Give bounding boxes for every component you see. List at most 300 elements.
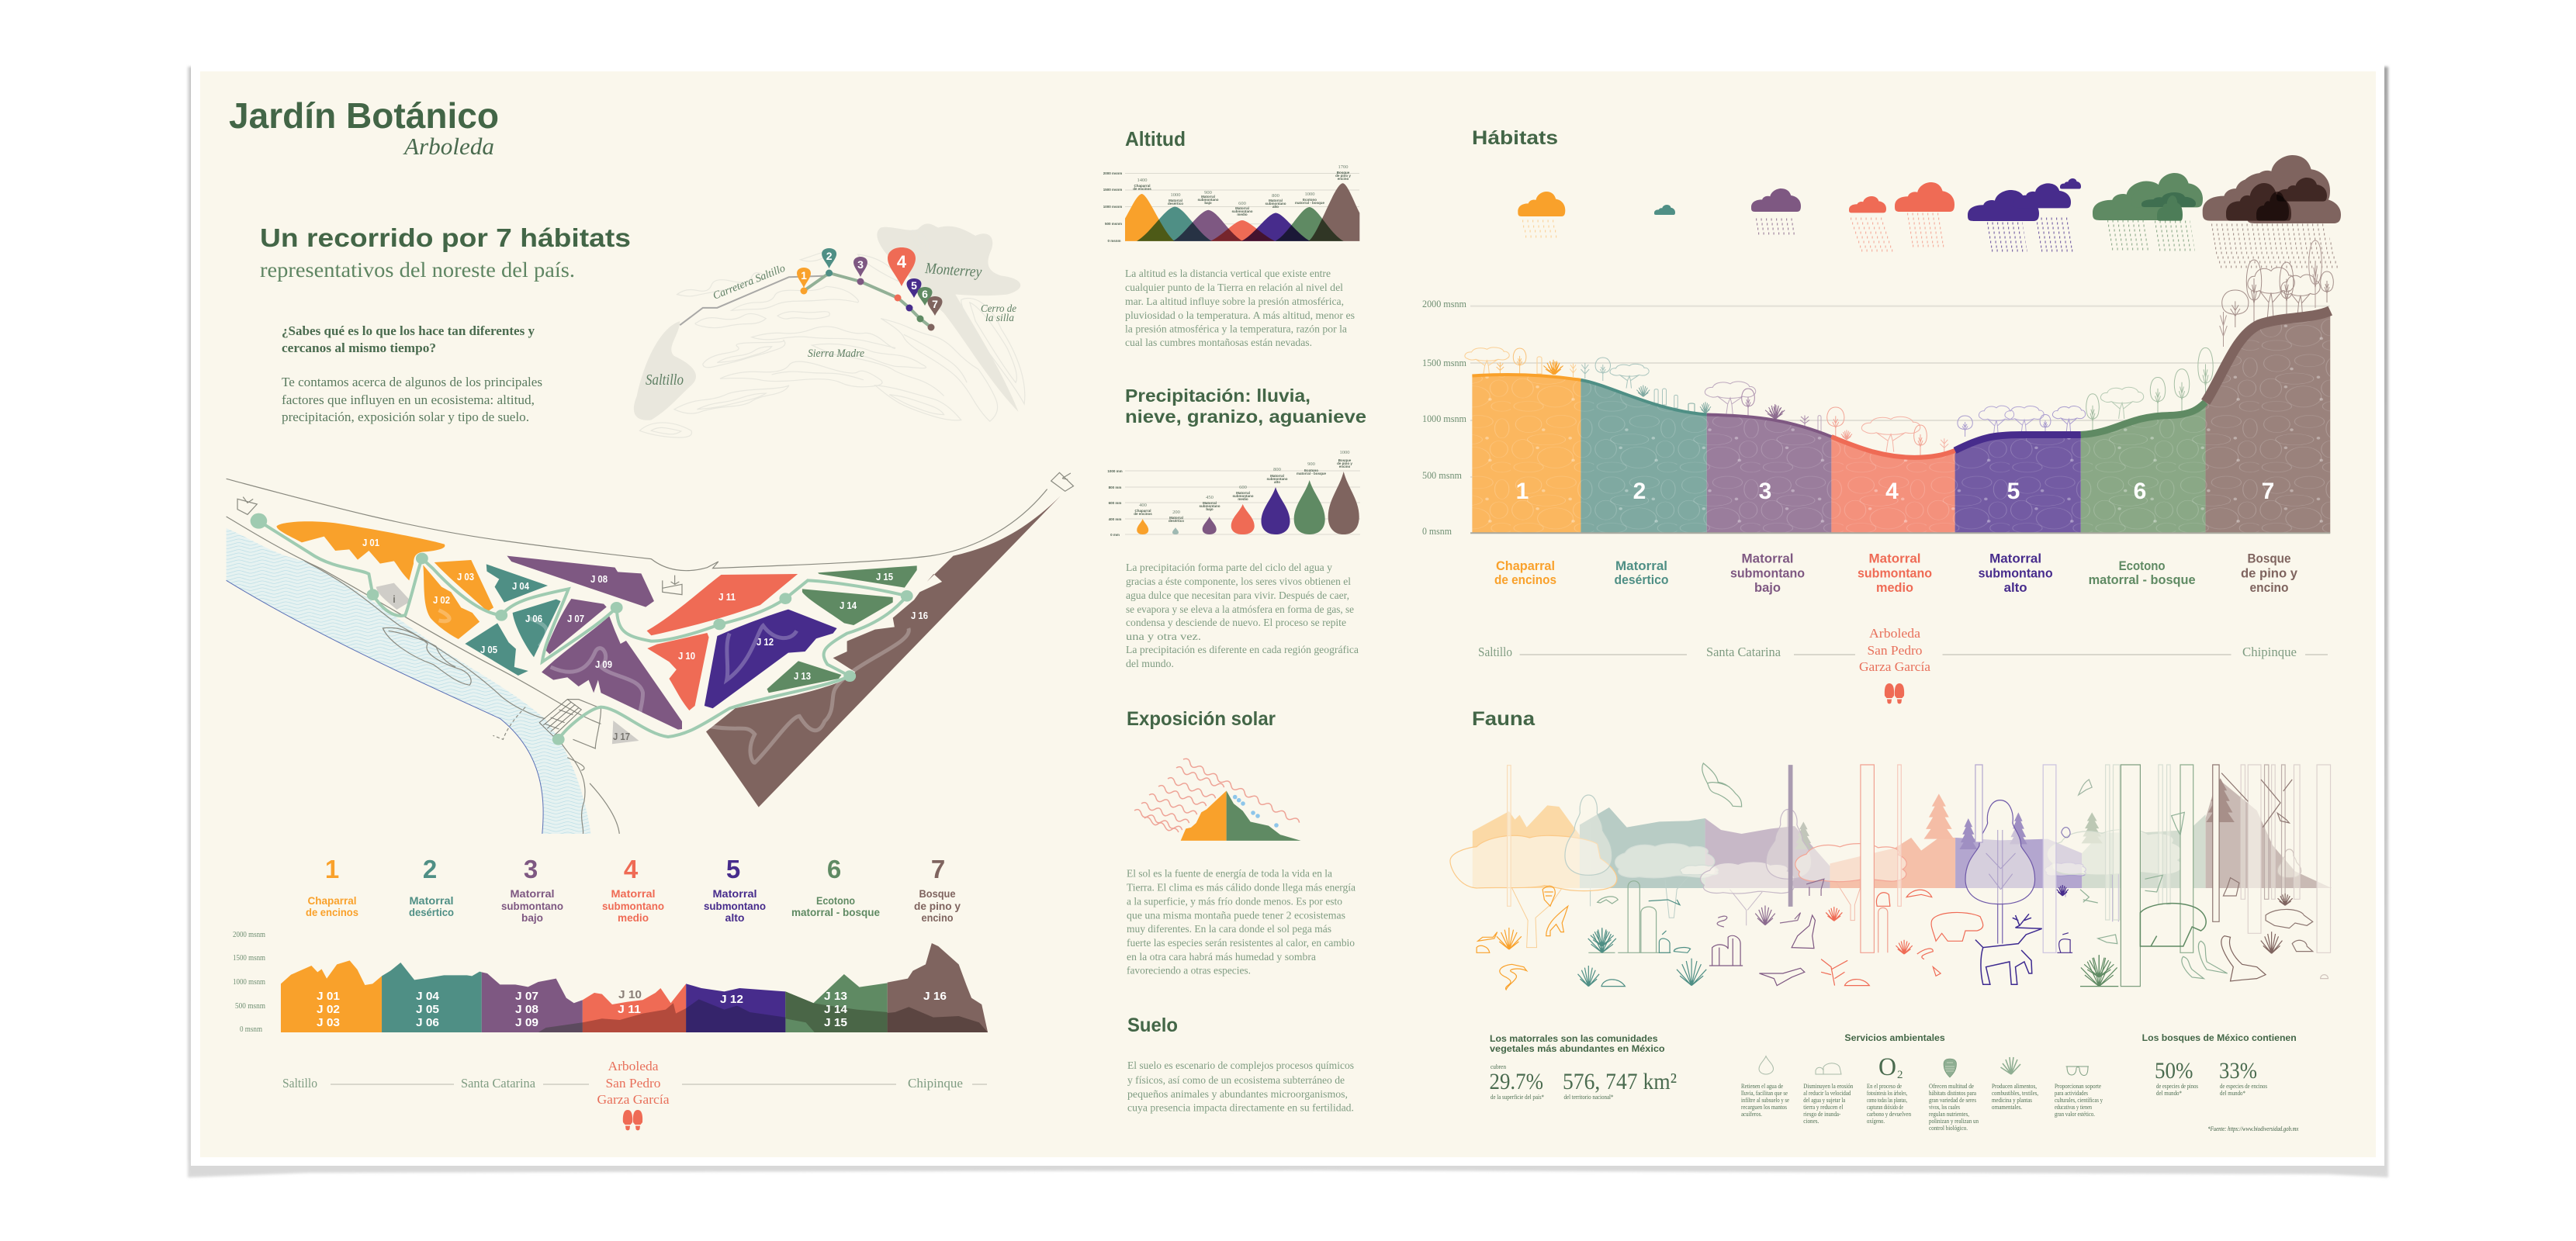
precipitacion text: La precipitación es diferente en cada región geográfica bbox=[1126, 644, 1359, 655]
intro text: cercanos al mismo tiempo? bbox=[282, 340, 436, 355]
tree crowns bbox=[1450, 795, 2301, 904]
service text columns: como todas las plantas, bbox=[1867, 1097, 1907, 1104]
route location line, right: San Pedro bbox=[1867, 643, 1923, 658]
altitud chart: 500 msnm bbox=[1105, 222, 1122, 226]
background mountains bbox=[1473, 778, 2332, 888]
stats: servicios ambientales bbox=[1741, 1034, 2103, 1132]
map labels: Cerro de bbox=[981, 303, 1016, 315]
service text columns: polinizan y realizan un bbox=[1929, 1118, 1979, 1125]
regional locator map bbox=[634, 223, 1025, 437]
altitud chart: encino bbox=[1338, 177, 1349, 181]
icon: footprints, left bbox=[623, 1110, 642, 1130]
altitud text: pluviosidad o la temperatura. A más altitud, menor es bbox=[1125, 309, 1355, 321]
altitud chart: 1000 msnm bbox=[1103, 205, 1122, 209]
precipitacion heading bbox=[1125, 385, 1366, 427]
altitud heading: Altitud bbox=[1125, 127, 1186, 150]
location pins: 2 bbox=[826, 250, 833, 262]
block labels: J 14 bbox=[840, 600, 857, 611]
precipitacion text: gracias a éste componente, los seres vivos obtienen el bbox=[1126, 576, 1351, 587]
profile labels: J 03 bbox=[317, 1016, 340, 1029]
walking path bbox=[258, 521, 907, 739]
map base shapes and contours bbox=[634, 223, 1025, 437]
exposicion text: favoreciendo a otras especies. bbox=[1127, 965, 1251, 977]
grid lines and axis: 0 msnm bbox=[1422, 525, 1452, 537]
altitud chart: 1400 bbox=[1137, 178, 1147, 183]
habitat names row: submontano bbox=[501, 900, 563, 912]
service text columns: al reducir la velocidad bbox=[1803, 1090, 1851, 1097]
precipitacion chart: 450 bbox=[1206, 495, 1214, 500]
altitud chart: 800 bbox=[1272, 193, 1279, 199]
habitat names: Chaparral bbox=[1496, 559, 1555, 573]
garden map shapes bbox=[227, 472, 1073, 834]
subtitle: un recorrido: representativos del noreste del país. bbox=[260, 258, 575, 282]
stats: bosques: del mundo* bbox=[2156, 1090, 2182, 1097]
habitat names: Ecotono bbox=[2119, 559, 2166, 573]
precipitacion heading: nieve, granizo, aguanieve bbox=[1125, 406, 1366, 427]
altitud text: la presión atmosférica y la temperatura, razón por la bbox=[1125, 323, 1347, 335]
altitud chart: 1000 bbox=[1305, 192, 1314, 197]
block J 11 bbox=[647, 574, 798, 635]
servicios heading: Servicios ambientales bbox=[1844, 1034, 1945, 1043]
block J 01 bbox=[276, 521, 445, 580]
profile labels: J 02 bbox=[317, 1003, 340, 1016]
habitats heading: Hábitats bbox=[1472, 127, 1558, 149]
stats: matorrales: del territorio nacional* bbox=[1564, 1094, 1614, 1101]
source note: *Fuente: https://www.biodiversidad.gob.mx bbox=[2207, 1125, 2299, 1132]
precipitacion chart: Bosque bbox=[1338, 458, 1352, 462]
habitat names: de encinos bbox=[1494, 573, 1556, 587]
intro text bbox=[282, 323, 542, 424]
route location line, right bbox=[1478, 626, 2328, 674]
block J 17 bbox=[612, 721, 639, 744]
roads bbox=[227, 479, 1047, 834]
strata numbers bbox=[1516, 479, 2274, 504]
location pins bbox=[797, 247, 942, 316]
precipitacion chart: submontano bbox=[1266, 477, 1288, 481]
exposicion text: en la otra cara habrá más humedad y sombra bbox=[1127, 951, 1316, 963]
block J 09 bbox=[542, 616, 682, 730]
altitud chart: desértico bbox=[1168, 202, 1183, 206]
route location line, left bbox=[282, 1059, 987, 1107]
precipitacion chart: Matorral bbox=[1270, 474, 1284, 478]
service text columns: Disminuyen la erosión bbox=[1803, 1083, 1853, 1090]
habitat numbers row: 7 bbox=[931, 855, 945, 883]
suelo text bbox=[1127, 1060, 1354, 1114]
block J 12 bbox=[705, 610, 837, 708]
service text columns: En el proceso de bbox=[1867, 1083, 1902, 1090]
profile labels: J 13 bbox=[824, 990, 847, 1003]
habitat names row: de encinos bbox=[306, 906, 358, 918]
path nodes bbox=[251, 513, 913, 745]
altitud chart: 2000 msnm bbox=[1103, 171, 1122, 175]
info block bbox=[376, 583, 410, 610]
axis labels: 1000 msnm bbox=[233, 978, 265, 987]
habitat names: alto bbox=[2004, 581, 2027, 595]
axis labels: 2000 msnm bbox=[233, 931, 265, 939]
panel: fauna bbox=[1450, 708, 2332, 990]
service text columns: regulan nutrientes, bbox=[1929, 1111, 1969, 1118]
stats: matorrales: cubren bbox=[1491, 1063, 1506, 1070]
precipitacion chart: Matorral bbox=[1203, 501, 1217, 505]
vegetation line art bbox=[1465, 240, 2333, 456]
precipitacion chart: de pino y bbox=[1337, 461, 1352, 465]
axis labels: 0 msnm bbox=[240, 1025, 262, 1034]
panel: precipitacion bbox=[1107, 385, 1366, 669]
altitud text: cualquier punto de la Tierra en relación al nivel del bbox=[1125, 282, 1343, 293]
altitud chart: alto bbox=[1272, 205, 1279, 209]
map labels: Monterrey bbox=[924, 260, 982, 281]
altitud chart: Ecotono bbox=[1303, 198, 1317, 202]
grid lines and axis: 2000 msnm bbox=[1422, 298, 1466, 309]
altitud chart: submontano bbox=[1232, 209, 1253, 213]
intro text: ¿Sabes qué es lo que los hace tan diferentes y bbox=[282, 323, 535, 338]
clouds bbox=[1518, 155, 2341, 223]
pines bbox=[1795, 778, 2235, 849]
stats: bosques: del mundo* bbox=[2220, 1090, 2245, 1097]
exposicion heading: Exposición solar bbox=[1127, 708, 1276, 730]
precipitacion heading: Precipitación: lluvia, bbox=[1125, 385, 1311, 406]
service text columns: lluvia, facilitan que se bbox=[1741, 1090, 1788, 1097]
poster cream panel bbox=[200, 71, 2376, 1157]
icon: agave bbox=[2000, 1057, 2020, 1074]
profile labels: J 01 bbox=[317, 990, 340, 1003]
habitat numbers row: 5 bbox=[726, 855, 740, 883]
habitat names row: Matorral bbox=[511, 887, 554, 900]
route location line, right: Chipinque bbox=[2242, 645, 2297, 659]
precipitacion text: una y otra vez. bbox=[1126, 631, 1201, 642]
precipitacion text: agua dulce que necesitan para vivir. Después de caer, bbox=[1126, 589, 1349, 601]
habitat names: Bosque bbox=[2247, 552, 2290, 566]
precipitacion text bbox=[1126, 562, 1359, 669]
precipitacion chart: submontano bbox=[1200, 504, 1220, 508]
altitud chart: 900 bbox=[1204, 190, 1212, 195]
precipitacion chart: bajo bbox=[1206, 507, 1214, 511]
precipitacion chart: 900 bbox=[1307, 461, 1315, 467]
habitat names row: Matorral bbox=[410, 894, 453, 907]
habitat names row: Matorral bbox=[712, 887, 757, 900]
precipitacion chart: 800 bbox=[1273, 467, 1281, 472]
stats: matorrales: de la superficie del país* bbox=[1491, 1094, 1544, 1101]
block J 05 bbox=[465, 623, 528, 676]
block labels: J 04 bbox=[512, 581, 529, 592]
block labels: J 13 bbox=[794, 671, 811, 682]
habitat names row bbox=[306, 887, 961, 924]
route location line, right: Santa Catarina bbox=[1706, 645, 1781, 659]
route bbox=[804, 273, 931, 327]
precipitacion chart: 200 bbox=[1172, 510, 1180, 515]
profile labels bbox=[317, 988, 947, 1029]
habitat names row: matorral - bosque bbox=[791, 906, 880, 918]
habitat names row: submontano bbox=[602, 900, 664, 912]
precipitacion chart: alto bbox=[1274, 480, 1280, 484]
altitud chart: 1700 bbox=[1338, 164, 1349, 170]
subtitle: un recorrido: Un recorrido por 7 hábitats bbox=[260, 223, 631, 252]
habitat numbers row: 2 bbox=[423, 855, 437, 883]
service text columns: riesgo de inunda- bbox=[1803, 1111, 1841, 1118]
stats: matorrales: 29.7% bbox=[1490, 1069, 1543, 1094]
precipitacion chart: de encinos bbox=[1134, 512, 1152, 516]
habitat names row: de pino y bbox=[914, 900, 961, 912]
intro text: Te contamos acerca de algunos de los principales bbox=[282, 375, 542, 389]
exposicion text: fuerte las especies serán resistentes al calor, en cambio bbox=[1127, 937, 1355, 949]
building bbox=[539, 700, 581, 736]
axis labels: 500 msnm bbox=[235, 1002, 265, 1011]
intro text: precipitación, exposición solar y tipo de suelo. bbox=[282, 410, 529, 424]
map labels: Sierra Madre bbox=[808, 347, 864, 360]
soil strata chart bbox=[1470, 311, 2330, 533]
title bbox=[229, 95, 499, 160]
block J 07 bbox=[545, 599, 607, 654]
service text columns: medicina y plantas bbox=[1992, 1097, 2032, 1104]
altitud text: mar. La altitud influye sobre la presión atmosférica, bbox=[1125, 296, 1344, 307]
route location line, left: Garza García bbox=[597, 1092, 670, 1107]
grid lines and axis: 1500 msnm bbox=[1422, 357, 1466, 368]
habitat names row: Matorral bbox=[611, 887, 655, 900]
precipitacion text: del mundo. bbox=[1126, 658, 1174, 669]
habitat numbers row: 1 bbox=[325, 855, 339, 883]
service text columns: Ofrecen multitud de bbox=[1929, 1083, 1974, 1090]
habitat names row: Chaparral bbox=[307, 894, 357, 907]
habitat names row: desértico bbox=[409, 906, 454, 918]
vertical trunks bars bbox=[1508, 765, 2331, 987]
route stops bbox=[801, 270, 934, 330]
service text columns: ornamentales. bbox=[1992, 1104, 2022, 1111]
precipitacion chart: 600 bbox=[1239, 485, 1247, 490]
habitat names: matorral - bosque bbox=[2089, 573, 2196, 587]
service text columns: recarguen los mantos bbox=[1741, 1104, 1787, 1111]
profile labels: J 04 bbox=[416, 990, 440, 1003]
block labels: J 09 bbox=[595, 659, 612, 670]
stats: bosques bbox=[2142, 1034, 2297, 1097]
habitat names: medio bbox=[1876, 581, 1913, 595]
route location line, left: San Pedro bbox=[605, 1076, 661, 1091]
service text columns: carbono y devuelven bbox=[1867, 1111, 1911, 1118]
suelo text: El suelo es escenario de complejos procesos químicos bbox=[1127, 1060, 1354, 1071]
block labels: J 05 bbox=[480, 645, 497, 655]
block labels: J 15 bbox=[876, 572, 893, 582]
block labels: J 17 bbox=[613, 731, 630, 742]
service text columns: gran variedad de seres bbox=[1929, 1097, 1976, 1104]
altitud chart: 600 bbox=[1238, 201, 1246, 206]
altitud chart: Matorral bbox=[1201, 195, 1215, 199]
map labels bbox=[646, 260, 1016, 389]
service text columns: infiltre al subsuelo y se bbox=[1741, 1097, 1789, 1104]
subtitle: un recorrido bbox=[260, 223, 631, 282]
block J 10 bbox=[647, 633, 709, 710]
block labels: J 02 bbox=[433, 595, 450, 606]
block labels: J 03 bbox=[457, 572, 474, 582]
habitat names row: encino bbox=[922, 911, 953, 924]
service text columns bbox=[1741, 1083, 2103, 1132]
altitud chart: Matorral bbox=[1269, 199, 1283, 202]
habitat names: Matorral bbox=[1868, 552, 1921, 566]
suelo text: cuya presencia impacta directamente en su fertilidad. bbox=[1127, 1101, 1354, 1114]
precipitacion chart: medio bbox=[1238, 497, 1248, 501]
axis labels: 1500 msnm bbox=[233, 954, 265, 963]
sun rays and mountain bbox=[1134, 759, 1301, 841]
service text columns: gran valor estético. bbox=[2055, 1111, 2095, 1118]
strata numbers: 6 bbox=[2134, 479, 2146, 504]
precipitacion chart: 0 mm bbox=[1110, 533, 1120, 537]
precipitacion chart: 1000 mm bbox=[1107, 469, 1123, 473]
trails bbox=[438, 610, 909, 762]
location pins: 7 bbox=[932, 298, 938, 310]
poster shadow bbox=[188, 67, 2388, 1177]
panel: suelo bbox=[1127, 1015, 1354, 1114]
stats: bosques: de especies de encinos bbox=[2220, 1083, 2267, 1090]
altitud chart: 0 msnm bbox=[1107, 239, 1121, 243]
exposicion text: muy diferentes. En la cara donde el sol pega más bbox=[1127, 923, 1331, 935]
route location line, right: Arboleda bbox=[1869, 626, 1920, 641]
profile labels: J 09 bbox=[515, 1016, 538, 1029]
habitat names: Matorral bbox=[1989, 552, 2041, 566]
profile labels: J 05 bbox=[416, 1003, 439, 1016]
habitat names: encino bbox=[2250, 581, 2289, 595]
habitat names: submontano bbox=[1730, 566, 1805, 580]
route location line, right: Saltillo bbox=[1478, 645, 1512, 659]
altitud chart: bajo bbox=[1204, 201, 1212, 205]
block J 03 bbox=[435, 560, 493, 611]
poster white border bbox=[191, 63, 2384, 1166]
habitat names: Matorral bbox=[1741, 552, 1794, 566]
altitud text: cual las cumbres montañosas están nevadas. bbox=[1125, 337, 1312, 348]
icon: footprints, right bbox=[1885, 683, 1904, 703]
stats: bosques: de especies de pinos bbox=[2156, 1083, 2198, 1090]
service text columns: del agua y sujetar la bbox=[1803, 1097, 1846, 1104]
service text columns: Producen alimentos, bbox=[1992, 1083, 2037, 1090]
habitat names row: Bosque bbox=[919, 887, 956, 900]
strata numbers: 1 bbox=[1516, 479, 1529, 504]
route location line, left: Santa Catarina bbox=[461, 1076, 535, 1091]
river bbox=[227, 528, 591, 834]
habitat numbers row bbox=[325, 855, 945, 883]
precipitacion text: condensa y desciende de nuevo. El proceso se repite bbox=[1126, 617, 1346, 628]
altitud chart: Matorral bbox=[1235, 206, 1249, 210]
service text columns: control biológico. bbox=[1929, 1125, 1968, 1132]
profile labels: J 08 bbox=[515, 1003, 538, 1016]
precipitacion chart: 400 bbox=[1139, 503, 1147, 508]
altitud chart: de pino y bbox=[1335, 174, 1351, 178]
altitud chart: 1500 msnm bbox=[1103, 188, 1122, 192]
precipitacion chart: desértico bbox=[1169, 519, 1184, 523]
garden map bbox=[227, 472, 1073, 834]
stats: matorrales: 576, 747 km² bbox=[1563, 1069, 1677, 1094]
location pins: 1 bbox=[801, 269, 807, 282]
stats: bosques: 50% bbox=[2155, 1058, 2193, 1084]
habitat names: Matorral bbox=[1615, 559, 1667, 573]
service text columns: Retienen el agua de bbox=[1741, 1083, 1783, 1090]
route location line, left: Arboleda bbox=[608, 1059, 659, 1073]
axis labels bbox=[233, 931, 265, 1034]
fauna heading: Fauna bbox=[1472, 708, 1536, 730]
precipitacion chart: matorral - bosque bbox=[1297, 472, 1326, 475]
suelo heading: Suelo bbox=[1127, 1015, 1178, 1036]
service text columns: combustibles, textiles, bbox=[1992, 1090, 2038, 1097]
altitud chart bbox=[1103, 164, 1359, 243]
panel: exposicion solar bbox=[1127, 708, 1356, 977]
profile labels: J 06 bbox=[416, 1016, 439, 1029]
habitat names row: alto bbox=[725, 911, 745, 924]
elevation profile chart bbox=[233, 931, 988, 1034]
block labels: J 07 bbox=[567, 614, 584, 624]
habitat numbers row: 4 bbox=[624, 855, 639, 883]
block J 08 bbox=[507, 556, 654, 607]
icon: water drop bbox=[1759, 1056, 1774, 1074]
service text columns: vivos, los cuales bbox=[1929, 1104, 1960, 1111]
altitud chart: submontano bbox=[1198, 198, 1219, 202]
profile labels: J 12 bbox=[720, 993, 743, 1006]
service text columns: ciones. bbox=[1803, 1118, 1819, 1125]
service text columns: tierra y reducen el bbox=[1803, 1104, 1844, 1111]
location pins: 4 bbox=[897, 252, 907, 271]
route location line, right: Garza García bbox=[1859, 659, 1930, 674]
altitud chart: de encinos bbox=[1133, 187, 1151, 191]
route location line, left: Chipinque bbox=[908, 1076, 963, 1091]
service text columns: educativas y tienen bbox=[2055, 1104, 2092, 1111]
icon: owl bbox=[1944, 1059, 1957, 1077]
stats: matorrales: Los matorrales son las comunidades bbox=[1490, 1035, 1658, 1044]
altitud text: La altitud es la distancia vertical que existe entre bbox=[1125, 268, 1331, 279]
icon: oxygen: 2 bbox=[1897, 1069, 1903, 1081]
panel: altitud bbox=[1103, 127, 1359, 348]
block J 14 bbox=[802, 589, 893, 625]
exposicion text: a la superficie, y más frío donde menos. Es por esto bbox=[1127, 895, 1342, 907]
altitud chart: 1000 bbox=[1170, 192, 1181, 198]
altitud chart: matorral - bosque bbox=[1295, 201, 1324, 205]
icon: soil mounds bbox=[1816, 1063, 1841, 1074]
precipitacion text: se evapora y se eleva a la atmósfera en forma de gas, se bbox=[1126, 603, 1354, 615]
precipitacion chart: 800 mm bbox=[1109, 486, 1121, 489]
strata numbers: 7 bbox=[2262, 479, 2274, 504]
profile labels: J 11 bbox=[618, 1003, 641, 1016]
precipitacion chart: encino bbox=[1339, 465, 1350, 468]
altitud chart: Matorral bbox=[1169, 199, 1182, 202]
habitat names row: bajo bbox=[521, 911, 543, 924]
profile labels: J 10 bbox=[618, 988, 642, 1001]
suelo text: pequeños animales y abundantes microorganismos, bbox=[1127, 1088, 1348, 1100]
block labels: J 16 bbox=[911, 610, 928, 621]
map labels: Carretera Saltillo bbox=[712, 263, 787, 302]
altitud text bbox=[1125, 268, 1355, 348]
map labels: la silla bbox=[985, 313, 1014, 324]
precipitacion chart: Matorral bbox=[1169, 516, 1183, 520]
title: Arboleda bbox=[403, 133, 494, 160]
precipitacion chart: 600 mm bbox=[1109, 501, 1121, 505]
altitud chart: Chaparral bbox=[1134, 184, 1151, 188]
habitat names row: Ecotono bbox=[816, 894, 855, 907]
precipitacion chart: Ecotono bbox=[1304, 468, 1318, 472]
block labels: J 12 bbox=[757, 637, 774, 648]
service text columns: culturales, científicas y bbox=[2055, 1097, 2103, 1104]
location pins: 6 bbox=[922, 288, 928, 300]
precipitacion chart: Matorral bbox=[1236, 491, 1250, 495]
block labels: J 06 bbox=[525, 614, 542, 624]
exposicion text: El sol es la fuente de energía de toda la vida en la bbox=[1127, 867, 1332, 880]
stats: matorrales bbox=[1490, 1035, 1677, 1101]
block labels: J 01 bbox=[362, 538, 379, 548]
grid lines and axis bbox=[1422, 298, 2330, 537]
block labels: J 11 bbox=[718, 592, 736, 603]
precipitacion chart: Chaparral bbox=[1134, 509, 1151, 513]
altitud chart: Bosque bbox=[1337, 171, 1350, 175]
precipitacion chart: 1000 bbox=[1339, 450, 1350, 455]
exposicion text: Tierra. El clima es más cálido donde llega más energía bbox=[1127, 881, 1356, 894]
block labels: J 10 bbox=[678, 651, 695, 662]
stats: matorrales: vegetales más abundantes en México bbox=[1490, 1045, 1665, 1054]
habitat names: submontano bbox=[1858, 566, 1932, 580]
habitat names: bajo bbox=[1754, 581, 1781, 595]
suelo text: y físicos, así como de un ecosistema subterráneo de bbox=[1127, 1074, 1345, 1086]
